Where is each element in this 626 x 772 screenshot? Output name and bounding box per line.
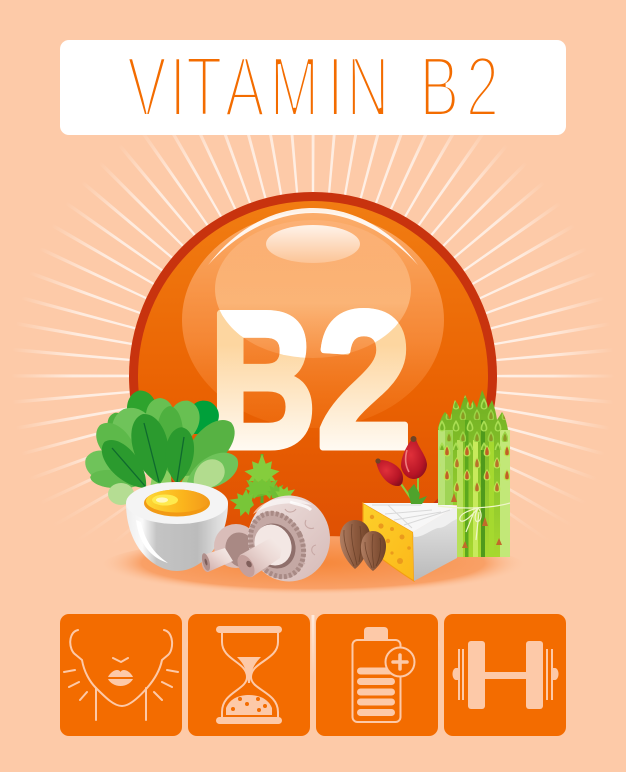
sunburst rays — [61, 124, 565, 628]
vitamin capsule sphere — [129, 192, 497, 560]
B2 letters: 2 — [317, 272, 412, 488]
B2 letters: B — [210, 271, 316, 489]
benefit icon: skin and face — [60, 614, 182, 736]
plus badge — [386, 648, 414, 676]
B2 letters: B — [210, 271, 316, 489]
food: asparagus bundle — [438, 390, 510, 557]
benefit icon: hourglass — [188, 614, 310, 736]
lips — [108, 670, 133, 686]
egg yolk — [144, 490, 210, 516]
title panel — [60, 40, 566, 135]
food: almonds — [340, 520, 386, 571]
benefit icon: dumbbell — [444, 614, 566, 736]
spinach front leaves — [94, 410, 196, 497]
B2 letters — [216, 308, 408, 450]
food: small mushroom — [200, 524, 262, 573]
benefit icon: energy battery — [316, 614, 438, 736]
food: cheese wedge — [363, 503, 457, 581]
food: large mushroom — [234, 496, 330, 588]
food: spinach — [80, 388, 244, 505]
ground shadow — [99, 536, 527, 600]
food: parsley — [227, 454, 301, 519]
asparagus ribbon — [438, 503, 510, 540]
B2 letters: 2 — [317, 272, 412, 488]
food: rosehip berries — [375, 436, 427, 504]
title text: VITAMIN B2 — [127, 40, 499, 135]
food: boiled egg — [126, 482, 228, 571]
